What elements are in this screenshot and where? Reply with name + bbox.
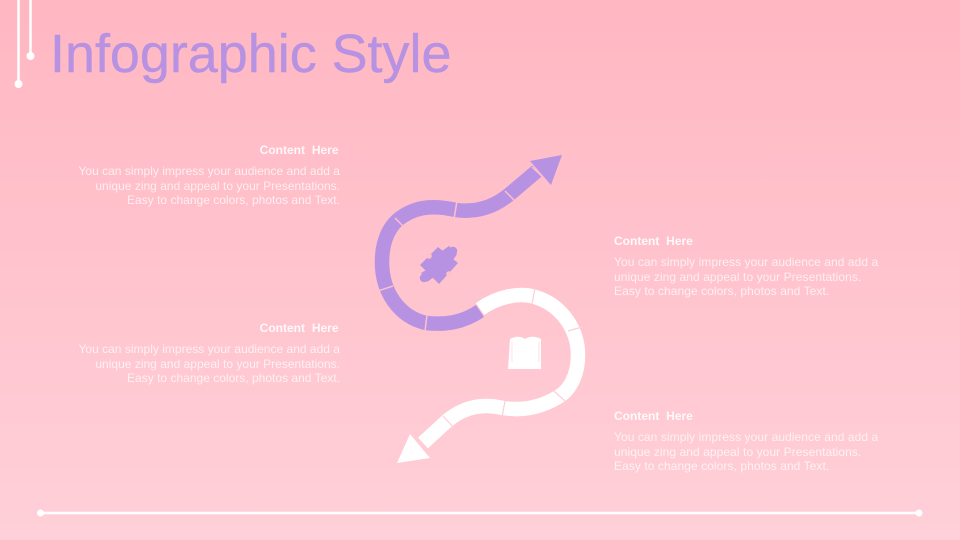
purple arrow xyxy=(378,155,562,331)
text block: lower right: You can simply impress your audience and add a xyxy=(614,430,878,444)
text block: lower left: Easy to change colors, photos and Text. xyxy=(127,371,340,385)
text block: top left: You can simply impress your audience and add a xyxy=(78,164,340,178)
text block: lower left xyxy=(78,321,340,385)
bottom rule xyxy=(38,510,922,516)
corner line short xyxy=(27,0,34,60)
text block: top left: Easy to change colors, photos and Text. xyxy=(127,193,340,207)
text block: lower right: Easy to change colors, photos and Text. xyxy=(614,459,829,473)
title: Infographic Style xyxy=(50,24,451,84)
text block: lower right: Content Here xyxy=(614,409,693,423)
text block: top left: Content Here xyxy=(260,143,338,157)
text block: lower left: unique zing and appeal to your Presentations. xyxy=(95,356,340,370)
text block: top left: unique zing and appeal to your Presentations. xyxy=(95,178,340,192)
icon: puzzle piece xyxy=(420,246,458,284)
text block: lower left: You can simply impress your audience and add a xyxy=(78,342,340,356)
text block: upper right: unique zing and appeal to your Presentations. xyxy=(614,270,861,284)
text block: lower right xyxy=(614,409,878,473)
text block: lower right: unique zing and appeal to your Presentations. xyxy=(614,444,861,458)
text block: lower left: Content Here xyxy=(260,321,338,335)
text block: upper right: You can simply impress your audience and add a xyxy=(614,255,878,269)
text block: upper right: Easy to change colors, photos and Text. xyxy=(614,284,829,298)
icon: open book xyxy=(508,337,541,369)
corner line long xyxy=(15,0,22,88)
white arrow xyxy=(397,288,582,463)
text block: top left xyxy=(78,143,340,207)
text block: upper right xyxy=(614,234,878,298)
text block: upper right: Content Here xyxy=(614,234,693,248)
